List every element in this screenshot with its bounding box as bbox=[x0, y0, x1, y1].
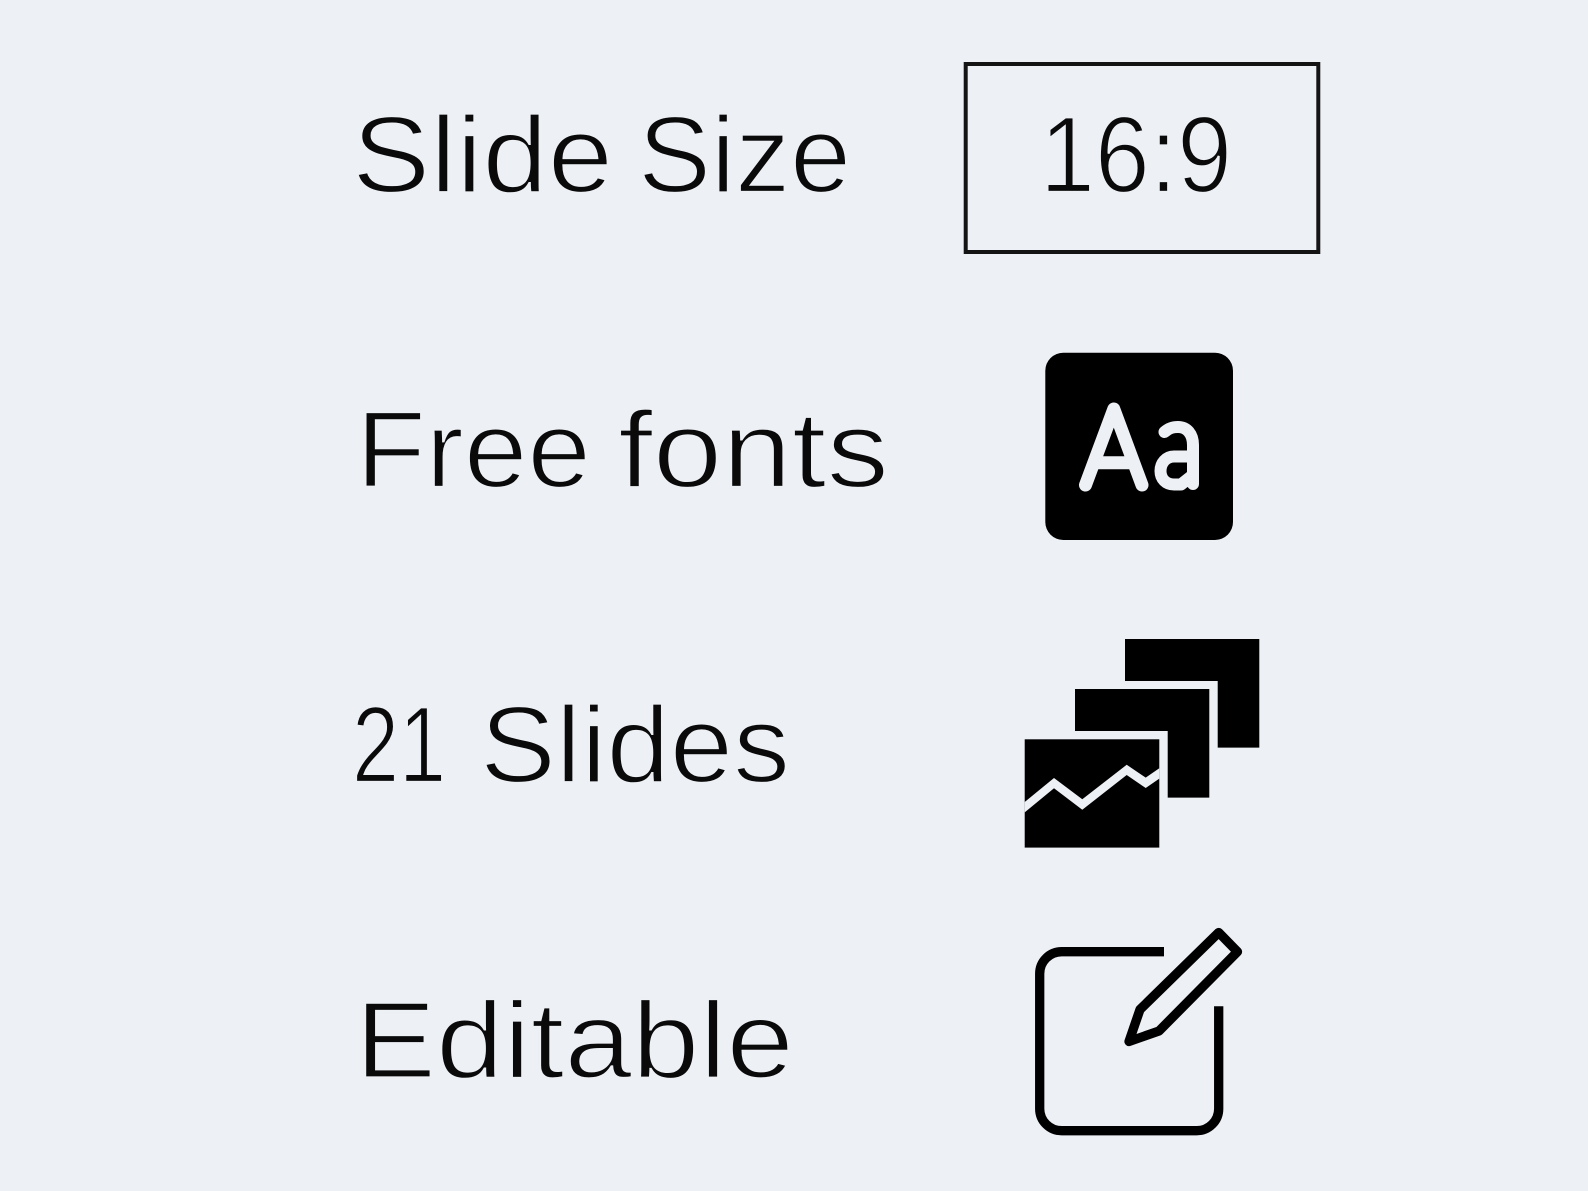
label: Free fonts: Free bbox=[356, 389, 591, 511]
label: Slide Size: Size bbox=[638, 94, 851, 216]
label: Slide Size bbox=[352, 94, 851, 216]
icon: font Aa tile bbox=[1045, 353, 1233, 540]
icon: 16:9 ratio box bbox=[966, 64, 1318, 252]
icon: edit box with pencil bbox=[1040, 932, 1238, 1131]
label: Editable: Editable bbox=[355, 980, 794, 1102]
label: Free fonts: fonts bbox=[618, 389, 889, 511]
label: 21 Slides: 21 bbox=[352, 684, 446, 806]
icon: 16:9 ratio box: 16:9 bbox=[1040, 94, 1232, 216]
label: 21 Slides bbox=[352, 684, 790, 806]
label: Slide Size: Slide bbox=[352, 94, 613, 216]
label: Free fonts bbox=[356, 389, 889, 511]
icon: stacked slides with chart bbox=[1025, 639, 1259, 848]
label: 21 Slides: Slides bbox=[480, 684, 790, 806]
